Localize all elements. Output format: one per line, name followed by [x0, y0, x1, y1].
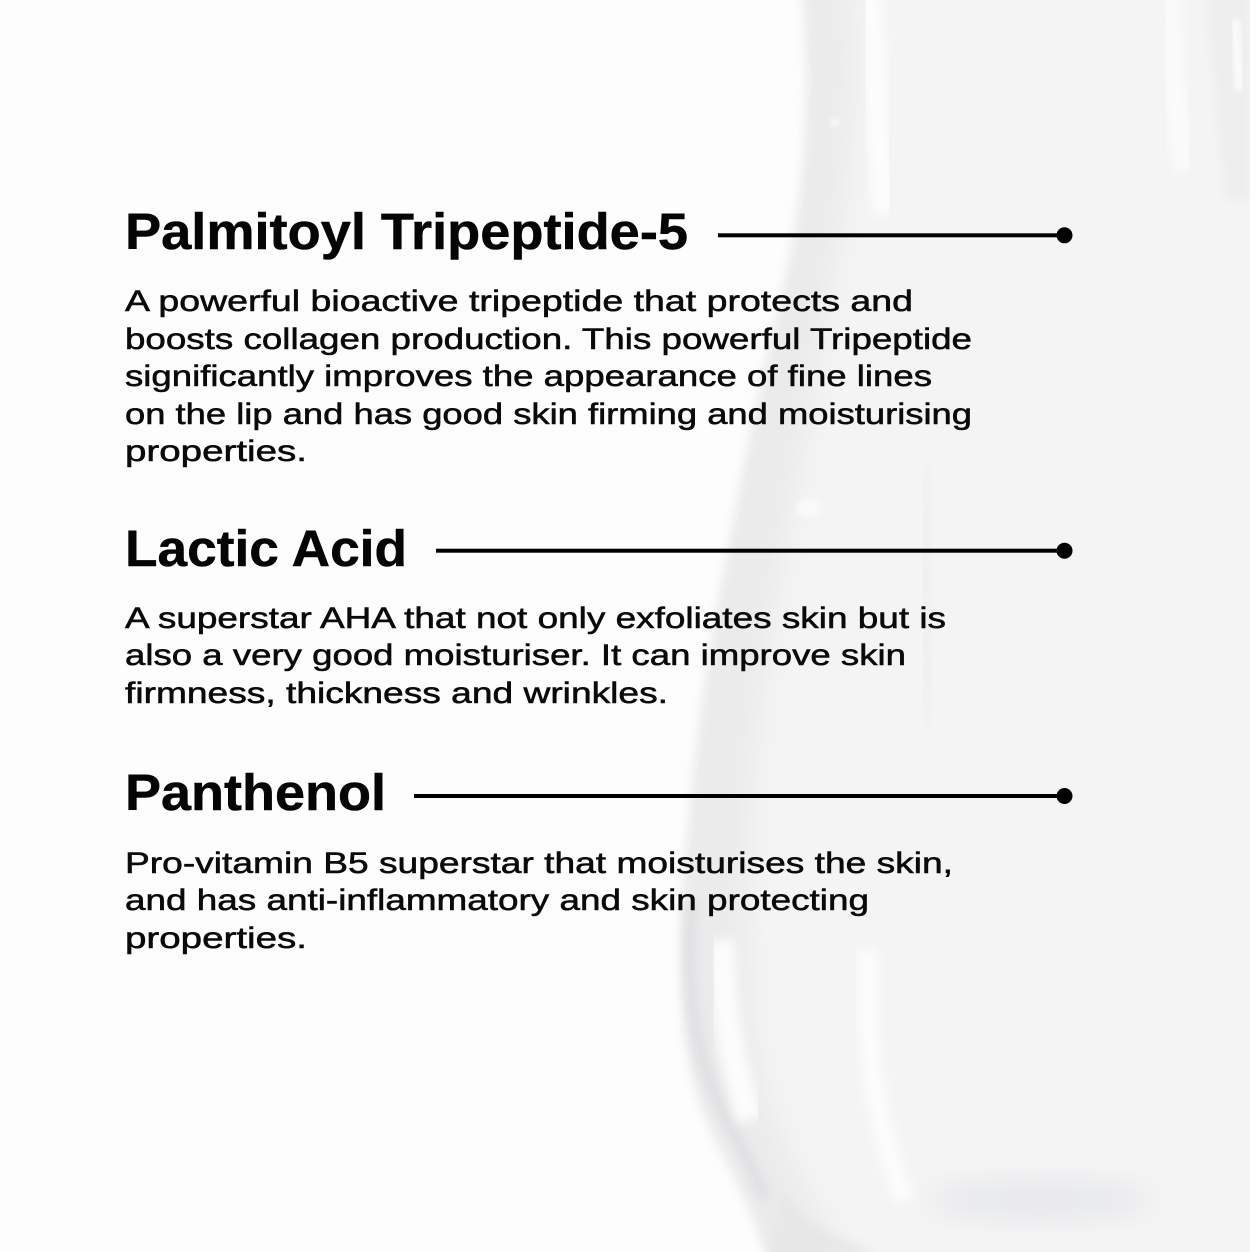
description paragraph: properties. [125, 922, 307, 955]
description paragraph: A powerful bioactive tripeptide that protects and [125, 285, 913, 318]
description paragraph: boosts collagen production. This powerful Tripeptide [125, 323, 972, 356]
description paragraph: on the lip and has good skin firming and moisturising [125, 398, 972, 431]
section: Panthenol [125, 764, 1072, 955]
description paragraph: A superstar AHA that not only exfoliates skin but is [125, 602, 946, 635]
connector line with end dot [414, 788, 1072, 804]
description paragraph: significantly improves the appearance of fine lines [125, 360, 932, 393]
heading: Palmitoyl Tripeptide-5: Palmitoyl Tripeptide-5 [125, 203, 688, 260]
connector line with end dot [436, 543, 1072, 559]
right edge strip [1250, 0, 1257, 1252]
description paragraph: firmness, thickness and wrinkles. [125, 677, 668, 710]
description paragraph: also a very good moisturiser. It can improve skin [125, 639, 906, 672]
connector line with end dot [718, 227, 1072, 243]
description paragraph [125, 602, 946, 710]
description paragraph: Pro-vitamin B5 superstar that moisturises the skin, [125, 847, 953, 880]
heading: Lactic Acid: Lactic Acid [125, 520, 407, 577]
section: Palmitoyl Tripeptide-5 [125, 203, 1072, 468]
description paragraph: and has anti-inflammatory and skin protecting [125, 884, 869, 917]
cream swatch background texture [681, 0, 1257, 1252]
description paragraph: properties. [125, 435, 307, 468]
section: Lactic Acid [125, 520, 1072, 710]
description paragraph [125, 285, 972, 468]
heading: Panthenol: Panthenol [125, 764, 386, 821]
description paragraph [125, 847, 953, 955]
